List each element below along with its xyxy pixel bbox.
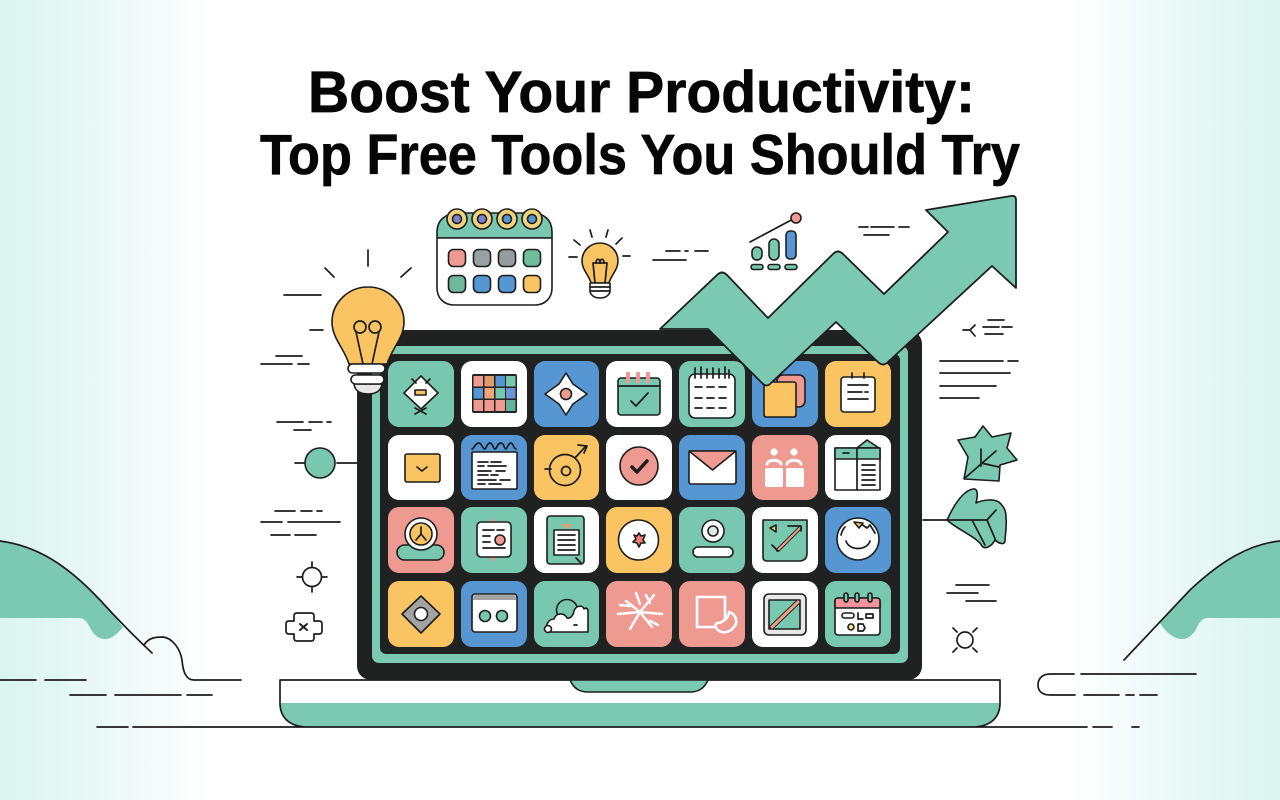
tile: target arrow (534, 435, 599, 500)
calendar illustration (437, 209, 552, 305)
tile: webcam (679, 507, 745, 573)
app icon grid (388, 361, 891, 647)
icon: lower leaf (923, 489, 1006, 548)
tile: people (752, 435, 818, 500)
title (260, 60, 1020, 187)
right hill (1124, 541, 1280, 660)
tile: task diamond (388, 361, 454, 427)
tile: stacked notes (752, 361, 818, 427)
tile: planner calendar (825, 581, 891, 647)
motion lines top right (859, 227, 909, 235)
ground dashes right (1038, 674, 1196, 727)
tile: notebook (461, 435, 527, 500)
tile: colour grid (461, 361, 527, 427)
tile: slash frame (752, 581, 818, 647)
tile: table (825, 435, 891, 500)
laptop screen (357, 330, 922, 680)
tile: gem diamond (388, 581, 454, 647)
tile: growth square (752, 507, 818, 573)
mini bar chart (750, 213, 801, 270)
tile: browser window (461, 581, 527, 647)
calendar cells (448, 250, 540, 292)
lower right notes (947, 585, 996, 601)
tile: smile dial (825, 507, 891, 573)
tile: cloud (534, 581, 599, 647)
growth arrow (660, 196, 1016, 386)
title: Boost Your Productivity: (308, 60, 975, 125)
tile: clock badge (388, 507, 454, 573)
icon: plus shape (286, 613, 322, 641)
left side notes (261, 422, 340, 535)
tile: burst (606, 581, 672, 647)
small light bulb (569, 230, 708, 298)
laptop base (133, 680, 1087, 727)
right side notes (940, 320, 1018, 398)
tile: wall calendar (679, 361, 745, 427)
icon: crosshair (297, 562, 327, 592)
tile: yellow note (825, 361, 891, 427)
ground dashes left (0, 680, 212, 727)
calendar rings (447, 209, 542, 229)
title: Top Free Tools You Should Try (260, 123, 1020, 187)
tile: alert circle (606, 507, 672, 573)
tile: compass star (534, 361, 599, 427)
large light bulb (261, 250, 411, 394)
tile: clipboard (534, 507, 599, 573)
tile: check circle (606, 435, 672, 500)
tile: check calendar (606, 361, 672, 427)
connector node (295, 448, 357, 478)
tile: envelope (679, 435, 745, 500)
icon: upper leaf (958, 426, 1017, 481)
tile: shape square (679, 581, 745, 647)
left hill (0, 541, 241, 680)
tile: inbox chevron (388, 435, 454, 500)
icon: sun outline (953, 628, 977, 652)
tile: info card (461, 507, 527, 573)
